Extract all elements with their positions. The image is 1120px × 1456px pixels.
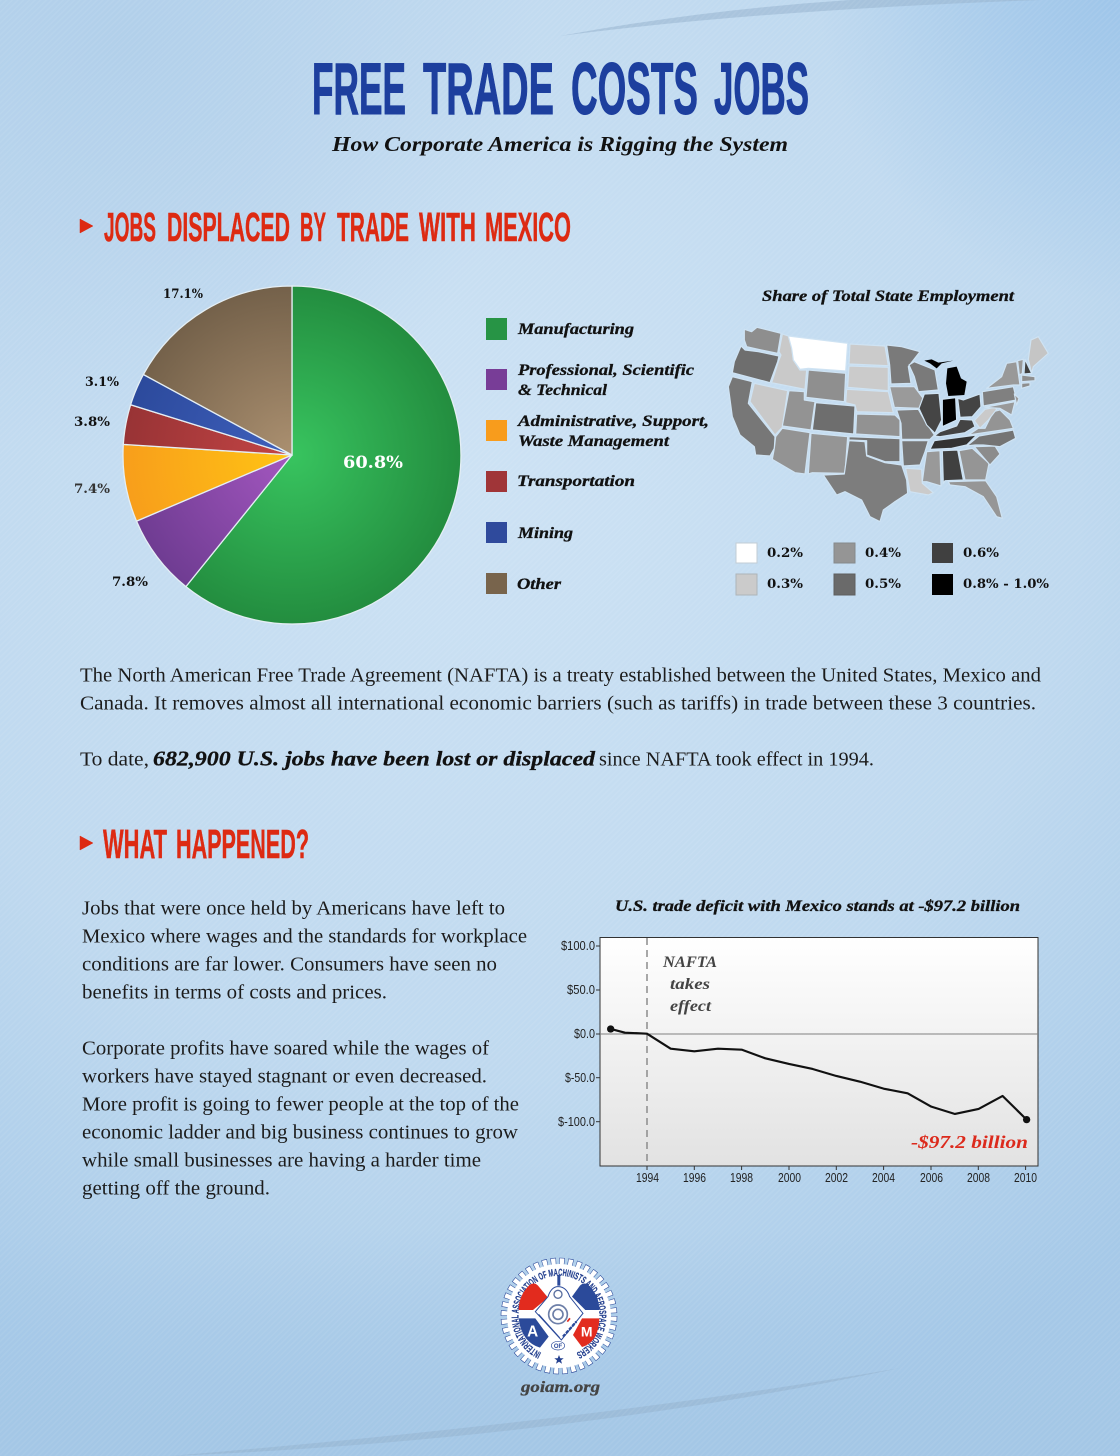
pie chart: jobs displaced by sector (74, 286, 461, 624)
pie chart: jobs displaced by sector: 7.8% (112, 575, 149, 590)
line chart: US trade balance with Mexico: 1996 (683, 1171, 706, 1185)
section heading: jobs displaced (80, 204, 571, 250)
website address: goiam.org (520, 1379, 600, 1396)
pie legend: Other (517, 576, 562, 593)
line chart: US trade balance with Mexico: $0.0 (574, 1027, 595, 1041)
line chart: US trade balance with Mexico: 2004 (872, 1171, 895, 1185)
line chart: US trade balance with Mexico: 2000 (778, 1171, 801, 1185)
text block: what happened: workers have stayed stagnant or even decreased. (82, 1066, 487, 1088)
map legend: 0.4% (865, 546, 902, 561)
line chart: US trade balance with Mexico (558, 938, 1038, 1185)
line chart: US trade balance with Mexico: 1994 (636, 1171, 659, 1185)
text block: what happened: Corporate profits have soared while the wages of (82, 1038, 489, 1060)
logo: IAM gear seal: OF (554, 1344, 562, 1350)
text block: what happened: economic ladder and big business continues to grow (82, 1122, 519, 1144)
line chart: US trade balance with Mexico: 1998 (730, 1171, 753, 1185)
section heading: jobs displaced: MEXICO (485, 204, 571, 250)
line chart heading: U.S. trade deficit with Mexico stands at -$97.2 billion (615, 898, 1020, 915)
line chart: US trade balance with Mexico: effect (670, 998, 712, 1015)
text block: NAFTA explanation (80, 664, 1041, 770)
line chart: US trade balance with Mexico: $50.0 (567, 983, 595, 997)
pie legend: Waste Management (518, 433, 670, 450)
line chart: US trade balance with Mexico: 2006 (920, 1171, 943, 1185)
map legend: 0.3% (767, 577, 804, 592)
pie legend: Manufacturing (517, 321, 634, 338)
section heading: jobs displaced: BY (300, 204, 326, 250)
map legend: 0.5% (865, 577, 902, 592)
title (312, 49, 809, 130)
text block: what happened: Mexico where wages and the standards for workplace (82, 926, 527, 948)
pie legend: Mining (517, 525, 573, 542)
text block: NAFTA explanation: To date, (80, 748, 149, 770)
line chart: US trade balance with Mexico: 2008 (967, 1171, 990, 1185)
line chart: US trade balance with Mexico: -$97.2 billion (911, 1132, 1028, 1152)
pie chart: jobs displaced by sector: 17.1% (163, 287, 204, 302)
section heading: jobs displaced: JOBS (104, 204, 156, 250)
section heading: what happened: HAPPENED? (176, 821, 309, 867)
text block: what happened: benefits in terms of costs and prices. (82, 982, 387, 1004)
line chart: US trade balance with Mexico: $-50.0 (565, 1071, 595, 1085)
map legend: 0.8% - 1.0% (963, 577, 1050, 592)
subtitle: How Corporate America is Rigging the System (331, 132, 788, 156)
title: FREE (312, 49, 406, 130)
pie chart: jobs displaced by sector: 7.4% (74, 482, 111, 497)
section heading: jobs displaced: WITH (419, 204, 476, 250)
text block: NAFTA explanation: Canada. It removes almost all international economic barriers (such as tariffs) in trade between these 3 countries. (80, 692, 1036, 714)
line chart: US trade balance with Mexico: takes (670, 976, 710, 993)
pie legend: Transportation (517, 473, 635, 490)
pie chart: jobs displaced by sector: 3.1% (85, 375, 120, 390)
map legend (736, 543, 1050, 595)
section heading: jobs displaced: DISPLACED (167, 204, 290, 250)
logo: IAM gear seal: INTERNATIONAL ASSOCIATION OF MACHINISTS AND AEROSPACE WORKERS (512, 1268, 606, 1359)
text block: NAFTA explanation: 682,900 U.S. jobs have been lost or displaced (153, 746, 596, 770)
text block: NAFTA explanation: The North American Free Trade Agreement (NAFTA) is a treaty established between the United States, Mexico and (80, 664, 1041, 686)
text block: what happened: Jobs that were once held by Americans have left to (82, 898, 505, 920)
pie legend: Professional, Scientific (517, 362, 694, 379)
text block: what happened: getting off the ground. (82, 1178, 270, 1200)
map legend: 0.6% (963, 546, 1000, 561)
logo: IAM gear seal: A (527, 1323, 538, 1340)
pie legend: & Technical (518, 382, 608, 399)
text block: NAFTA explanation: since NAFTA took effect in 1994. (599, 748, 874, 770)
map legend: 0.2% (767, 546, 804, 561)
choropleth map of US states (728, 327, 1048, 522)
pie legend: Administrative, Support, (517, 413, 709, 430)
line chart: US trade balance with Mexico: $-100.0 (558, 1115, 595, 1129)
section heading: what happened: WHAT (103, 821, 167, 867)
pie chart: jobs displaced by sector: 60.8% (343, 453, 403, 473)
logo: IAM gear seal (500, 1258, 618, 1374)
text block: what happened (82, 898, 527, 1200)
line chart: US trade balance with Mexico: 2002 (825, 1171, 848, 1185)
pie legend (486, 318, 709, 594)
line chart: US trade balance with Mexico: 2010 (1014, 1171, 1037, 1185)
text block: what happened: while small businesses are having a harder time (82, 1150, 481, 1172)
section heading: what happened (80, 821, 309, 867)
section heading: jobs displaced: TRADE (337, 204, 409, 250)
title: TRADE (423, 49, 554, 130)
title: COSTS (571, 49, 698, 130)
line chart: US trade balance with Mexico: NAFTA (662, 954, 717, 971)
text block: what happened: More profit is going to fewer people at the top of the (82, 1094, 519, 1116)
text: JOBS (714, 49, 809, 130)
logo: IAM gear seal: M (581, 1323, 592, 1339)
text block: what happened: conditions are far lower. Consumers have seen no (82, 954, 497, 976)
pie chart: jobs displaced by sector: 3.8% (74, 415, 111, 430)
map heading: Share of Total State Employment (762, 288, 1015, 305)
line chart: US trade balance with Mexico: $100.0 (561, 939, 595, 953)
